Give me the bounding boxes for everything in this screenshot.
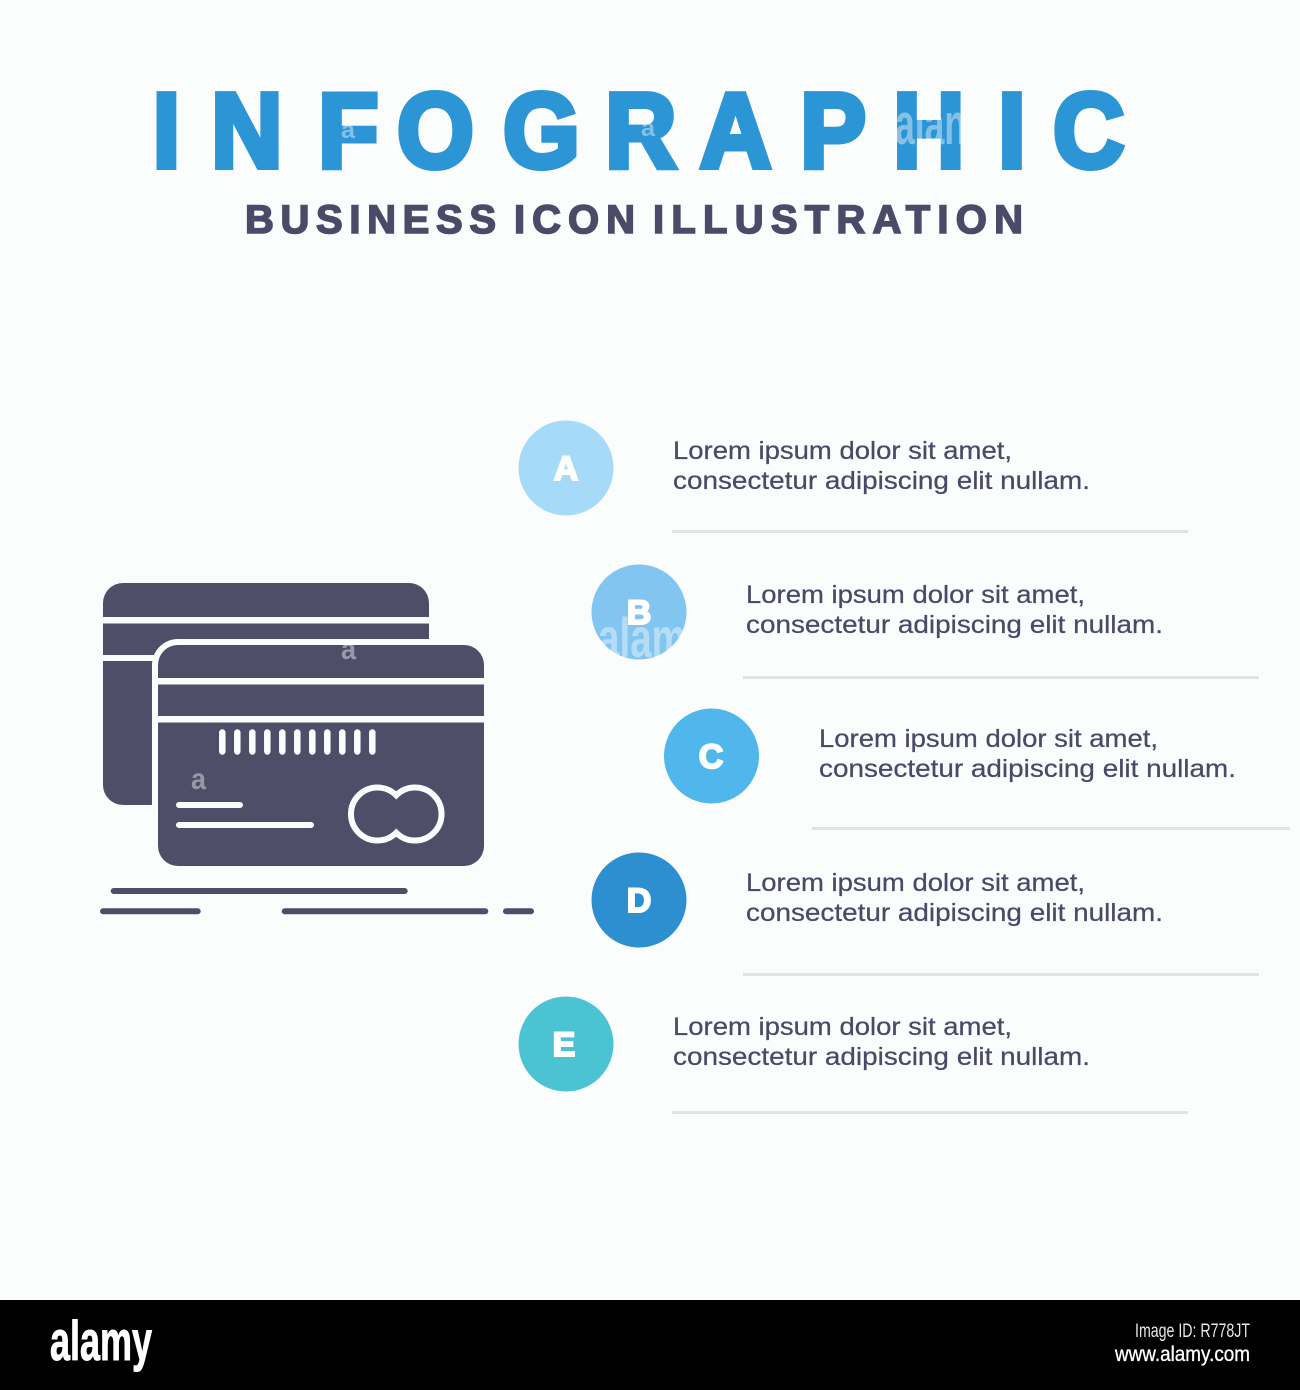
step B: consectetur adipiscing elit nullam. <box>746 611 1163 639</box>
step A: A <box>554 450 578 488</box>
image id: Image ID: R778JT <box>1135 1321 1250 1342</box>
subtitle: BUSINESS <box>245 198 496 242</box>
step E: consectetur adipiscing elit nullam. <box>673 1043 1090 1071</box>
step B: Lorem ipsum dolor sit amet, <box>746 581 1085 609</box>
footer logo: alamy <box>50 1309 152 1372</box>
icon: bank cards <box>103 583 531 911</box>
step E: E <box>553 1026 575 1064</box>
watermark marks: a <box>191 763 206 796</box>
title: INFOGRAPHIC <box>153 71 1124 190</box>
step C <box>664 708 1290 830</box>
watermark marks: alam <box>598 606 686 669</box>
subtitle: ICON <box>514 198 635 242</box>
subtitle: ILLUSTRATION <box>653 198 1023 242</box>
step A <box>518 420 1188 533</box>
step C: C <box>699 738 723 776</box>
step C: Lorem ipsum dolor sit amet, <box>819 725 1158 753</box>
step A: consectetur adipiscing elit nullam. <box>673 467 1090 495</box>
watermark marks: a <box>641 115 656 142</box>
icon base lines <box>103 891 531 911</box>
step B: B <box>627 594 651 632</box>
step A: Lorem ipsum dolor sit amet, <box>673 437 1012 465</box>
watermark marks: a <box>341 117 356 144</box>
step D: D <box>627 882 651 920</box>
watermark marks <box>191 92 966 796</box>
website: www.alamy.com <box>1114 1343 1250 1366</box>
front card <box>152 639 490 872</box>
back card <box>103 583 429 805</box>
step D <box>592 852 1259 976</box>
step E <box>518 996 1188 1114</box>
footer bar <box>0 1300 1300 1390</box>
watermark marks: a <box>341 633 356 666</box>
step D: Lorem ipsum dolor sit amet, <box>746 869 1085 897</box>
step B <box>592 564 1259 679</box>
step E: Lorem ipsum dolor sit amet, <box>673 1013 1012 1041</box>
watermark marks: alan <box>895 92 966 157</box>
subtitle <box>245 198 1023 242</box>
step D: consectetur adipiscing elit nullam. <box>746 899 1163 927</box>
step C: consectetur adipiscing elit nullam. <box>819 755 1236 783</box>
